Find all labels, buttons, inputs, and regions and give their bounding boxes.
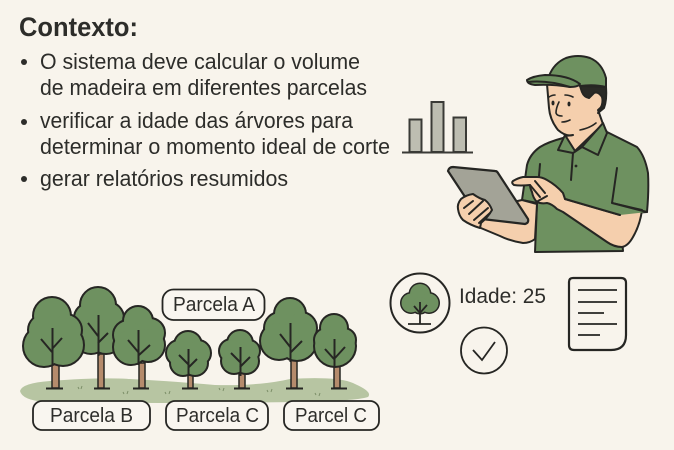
label: Parcela B [33,401,150,430]
label: Parcel C: Parcel C [295,405,367,427]
label: Parcel C [284,401,379,430]
placket [539,153,617,203]
illustration: worker with tablet [448,56,648,252]
tree 4 [167,332,210,388]
hair [580,86,606,113]
grass tufts [78,386,320,396]
text block: context bullets: verificar a idade das árvores para [40,108,354,133]
tree 7 [315,315,355,388]
tree 2 [74,288,123,388]
cap [549,56,606,87]
tree 6 [261,299,316,388]
text block: context bullets: de madeira em diferentes parcelas [40,75,367,100]
label: Parcela C [166,401,268,430]
title: Contexto: [19,12,138,42]
left hand [458,194,492,228]
shirt [522,122,648,252]
cap bill [527,75,580,87]
tree 5 [220,331,259,388]
label: Parcela A [162,290,264,320]
tablet [448,167,528,224]
sleeve hem [565,199,647,215]
text block: context bullets: O sistema deve calcular o volume [40,49,360,74]
neck and face [547,78,604,151]
bar chart icon [402,102,473,152]
icon: check mark circle [461,328,507,374]
collar [558,123,607,155]
left arm [476,200,537,243]
tree 3 [114,307,164,388]
icon: tree in circle [390,274,450,332]
label: Parcela B: Parcela B [50,405,133,427]
tree 1 [24,298,83,388]
right arm and hand [512,177,642,247]
text block: context bullets [21,49,390,191]
fingers [530,181,547,201]
icon: report document [569,278,626,350]
text: age: Idade: 25 [459,285,546,308]
ground strip [20,378,369,403]
label: Parcela A: Parcela A [173,294,256,316]
text block: context bullets: gerar relatórios resumidos [40,166,288,191]
label: Parcela C: Parcela C [176,405,259,427]
text block: context bullets: determinar o momento ideal de corte [40,134,390,159]
face details [549,95,596,130]
